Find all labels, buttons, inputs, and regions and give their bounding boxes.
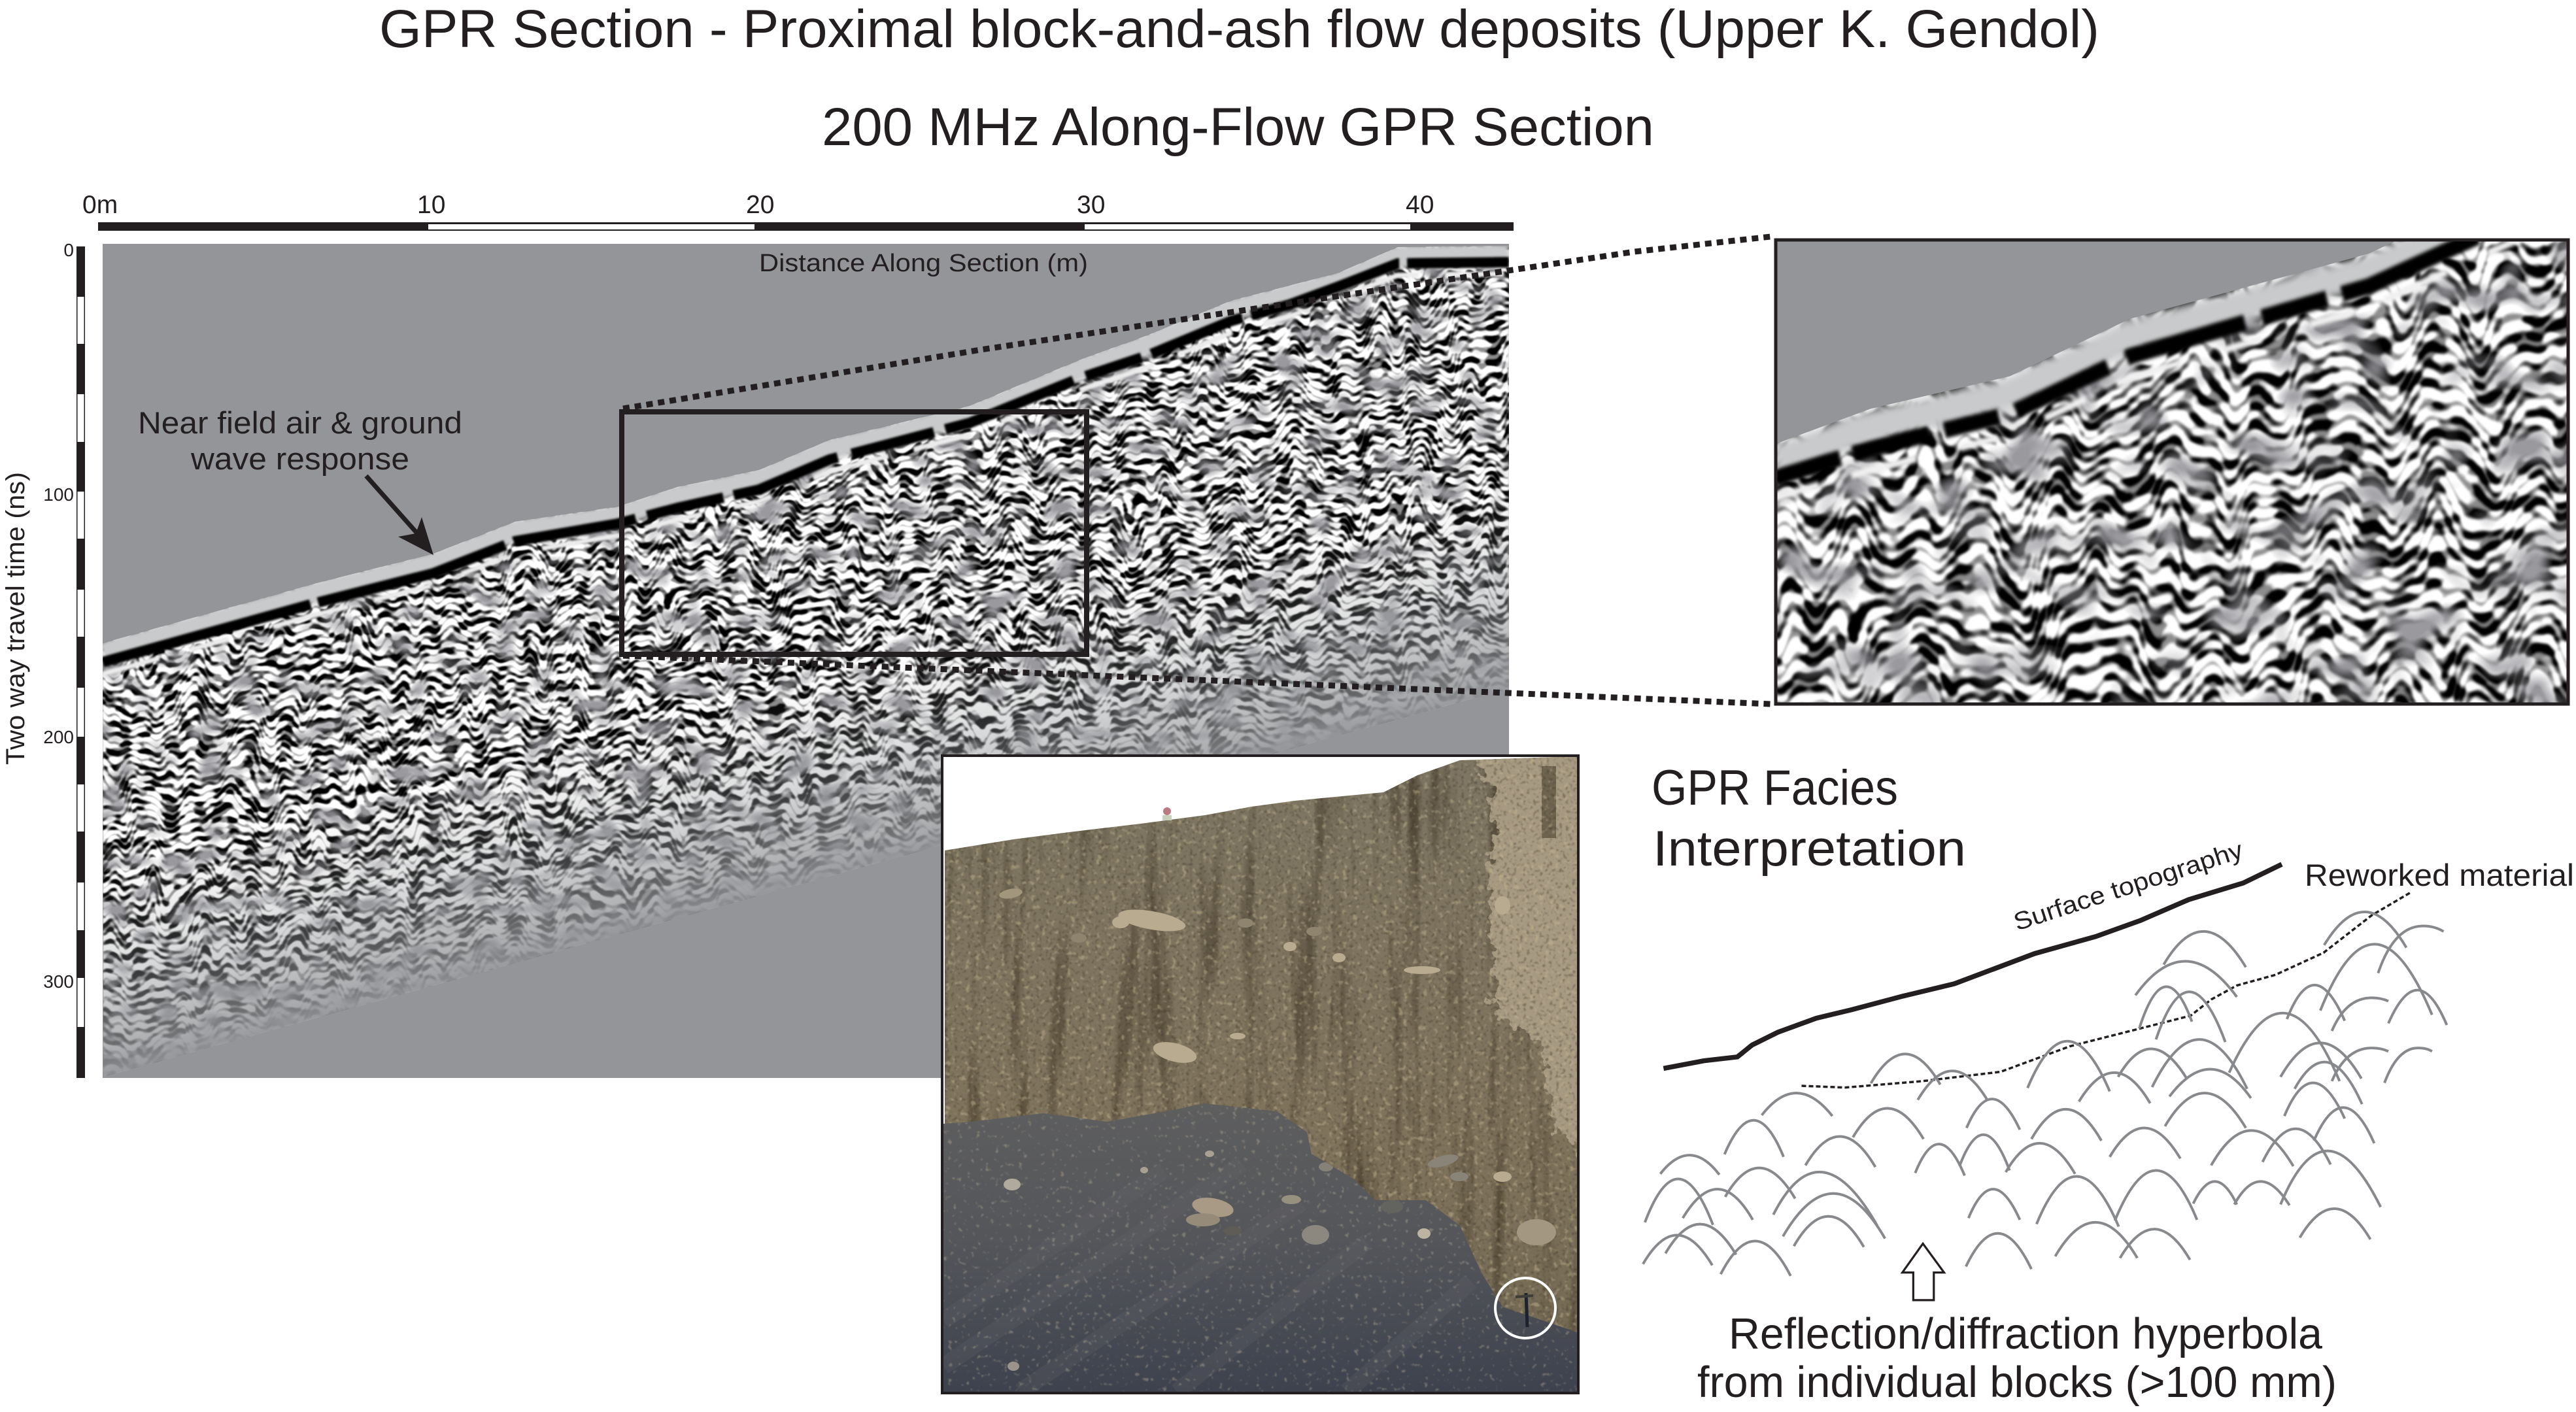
label: surface topography: Surface topography <box>2010 837 2246 937</box>
two-way travel time scale: 200 <box>43 727 74 747</box>
hammer for scale <box>1516 1293 1533 1327</box>
surface topography line <box>1663 864 2282 1068</box>
panel: enlarged radargram inset <box>1774 238 2569 706</box>
y axis title: Two way travel time (ns) <box>1 472 30 765</box>
distance scale bar <box>82 191 1514 231</box>
callout: near field air and ground wave response <box>138 405 462 476</box>
label: hyperbola caption <box>1697 1309 2337 1407</box>
two-way travel time scale: 100 <box>43 484 74 505</box>
distance scale bar: 40 <box>1406 191 1434 219</box>
two-way travel time scale <box>43 240 85 1078</box>
distance scale bar: 20 <box>746 191 774 219</box>
rocks on wall <box>998 887 1556 1245</box>
subtitle: 200 MHz Along-Flow GPR Section <box>822 97 1654 157</box>
panel: GPR radargram section <box>103 244 1509 1078</box>
label: hyperbola caption: from individual blocks (>100 mm) <box>1697 1358 2337 1407</box>
distance scale bar: 0m <box>82 191 118 219</box>
dotted connector: upper <box>623 237 1771 409</box>
two-way travel time scale: 300 <box>43 971 74 992</box>
hyperbola arcs <box>1643 912 2447 1276</box>
distance scale bar: 30 <box>1077 191 1105 219</box>
reworked material dashed line <box>1801 892 2411 1088</box>
heading: GPR facies interpretation <box>1652 760 1966 877</box>
zoom box on radargram <box>622 412 1087 654</box>
diagram: facies interpretation <box>1643 864 2447 1300</box>
callout: near field air and ground wave response: wave response <box>190 441 409 476</box>
outlined up arrow <box>1903 1243 1944 1300</box>
person on crest <box>1162 807 1172 820</box>
dotted connector: lower <box>623 656 1771 704</box>
label: distance along section: Distance Along Section (m) <box>759 250 1088 277</box>
label: hyperbola caption: Reflection/diffraction hyperbola <box>1729 1309 2323 1358</box>
heading: GPR facies interpretation: GPR Facies <box>1652 760 1898 816</box>
heading: GPR facies interpretation: Interpretation <box>1653 821 1966 877</box>
rocks on ground <box>1004 1151 1431 1371</box>
two-way travel time scale: 0 <box>63 240 74 260</box>
arrow: to surface reflection <box>366 476 433 555</box>
distance scale bar: 10 <box>417 191 445 219</box>
panel: outcrop photograph <box>942 739 1589 1393</box>
label: reworked material: Reworked material <box>2305 858 2574 892</box>
scale circle <box>1495 1278 1555 1338</box>
title: GPR Section - Proximal block-and-ash flow deposits (Upper K. Gendol) <box>379 0 2099 59</box>
callout: near field air and ground wave response: Near field air & ground <box>138 405 462 440</box>
